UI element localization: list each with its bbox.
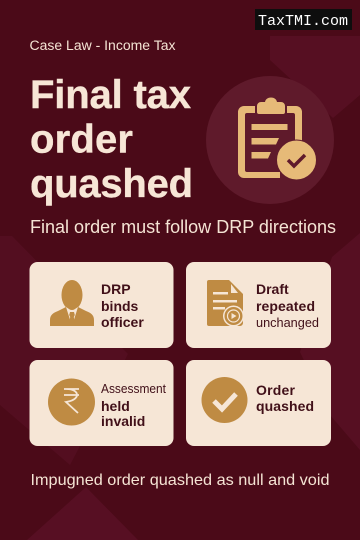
subtitle: Final order must follow DRP directions	[30, 217, 336, 237]
title: quashed	[30, 162, 193, 206]
icon: check coin	[202, 377, 248, 423]
title: Final tax	[30, 73, 191, 117]
card text: officer	[101, 314, 144, 330]
icon: officer	[50, 280, 94, 326]
icon: clipboard with check	[206, 76, 334, 204]
card: Draft repeated unchanged	[186, 262, 331, 348]
card: DRP binds officer	[30, 262, 174, 348]
footer note: Impugned order quashed as null and void	[30, 472, 330, 489]
card text: invalid	[101, 413, 145, 429]
card text	[101, 281, 144, 330]
title: order	[30, 118, 133, 162]
card: Order quashed	[186, 360, 331, 446]
icon: rupee coin	[48, 378, 95, 426]
watermark: TaxTMI.com: TaxTMI.com	[258, 13, 348, 30]
card text: repeated	[256, 298, 315, 314]
card text: held	[101, 398, 130, 414]
card: Assessment held invalid	[30, 360, 174, 446]
card text: quashed	[256, 398, 314, 414]
category label: Case Law - Income Tax	[30, 38, 176, 53]
card text: DRP	[101, 281, 131, 297]
card text	[256, 281, 319, 330]
card text	[101, 382, 166, 429]
card text: Draft	[256, 281, 289, 297]
card text: Assessment	[101, 382, 166, 396]
title	[30, 73, 193, 206]
card text: binds	[101, 298, 139, 314]
icon: document with replay	[207, 280, 244, 326]
card text	[256, 382, 314, 414]
card text: Order	[256, 382, 296, 398]
card text: unchanged	[256, 315, 319, 330]
